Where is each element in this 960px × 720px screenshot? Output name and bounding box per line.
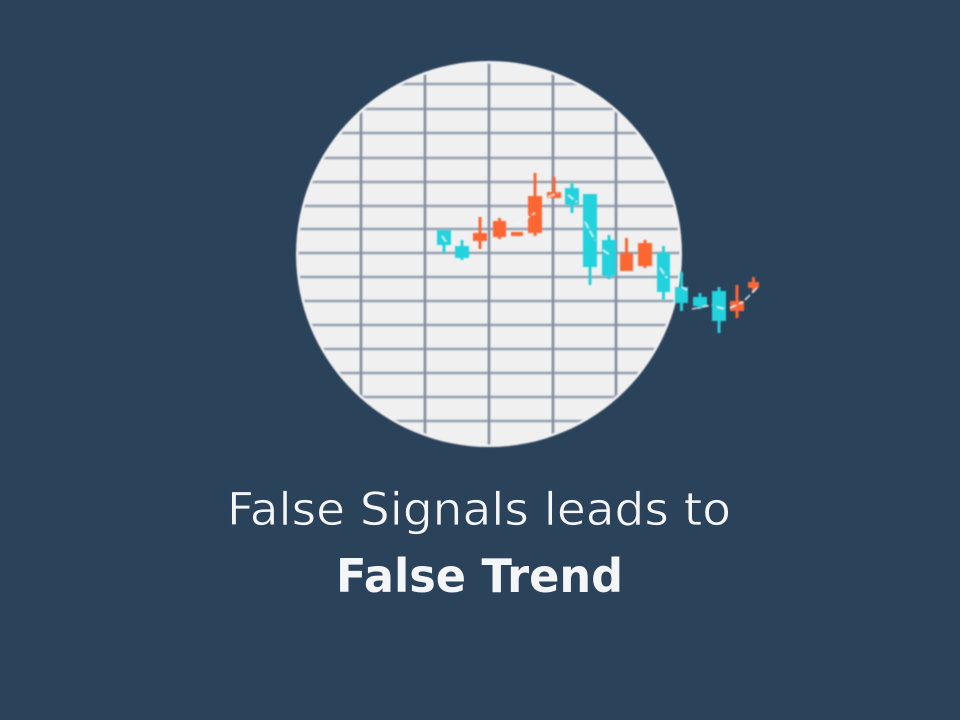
bearish candles — [437, 183, 726, 333]
candlestick chart — [437, 173, 759, 333]
dashed trend line — [442, 193, 758, 309]
chart circle with grid — [295, 60, 683, 448]
bullish candles — [473, 173, 759, 318]
title line 2: False Trend — [336, 549, 623, 603]
title line 1: False Signals leads to — [227, 483, 731, 536]
